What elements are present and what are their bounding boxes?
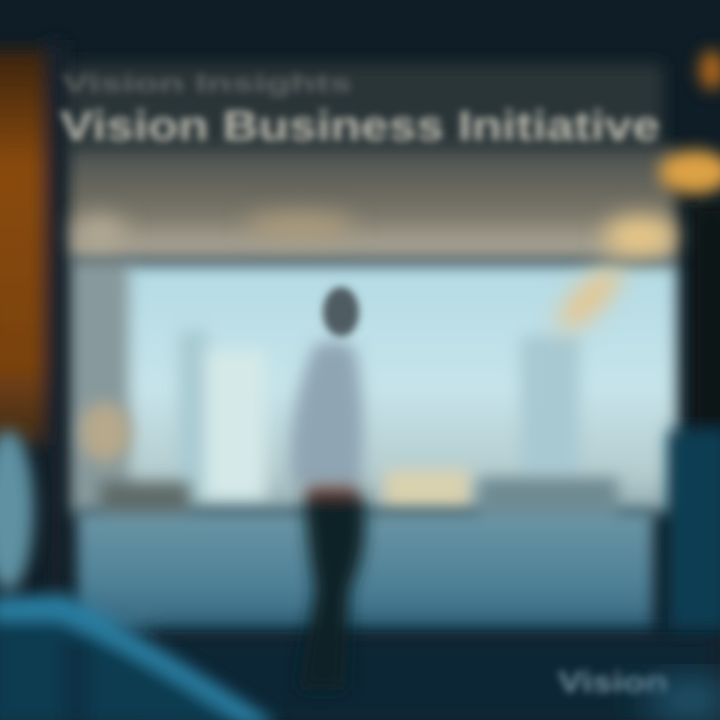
figure head bbox=[323, 287, 359, 337]
panel: orange wooden column bbox=[0, 40, 66, 600]
figure shirt bbox=[290, 341, 363, 488]
panel: bottom dark floor bbox=[150, 632, 720, 720]
panel: dark heading band bbox=[58, 64, 663, 154]
panel: right dark column bbox=[668, 205, 720, 630]
caption: bottom right watermark: Vision bbox=[558, 666, 668, 699]
panel: ceiling bbox=[64, 148, 676, 260]
lights: ceiling glow bbox=[74, 215, 676, 338]
figure: walking man bbox=[290, 287, 365, 690]
heading text bbox=[60, 70, 660, 149]
panel: floor bbox=[76, 402, 654, 632]
figure trousers bbox=[298, 486, 365, 690]
icon: orange lamp bbox=[659, 50, 720, 194]
glow: bottom right corner bbox=[645, 682, 720, 718]
foreground: blue chair bottom left bbox=[0, 430, 280, 720]
main heading line: Vision Business Initiative bbox=[60, 102, 660, 149]
small heading line: Vision Insights bbox=[62, 70, 352, 98]
panel: window bbox=[66, 258, 678, 513]
